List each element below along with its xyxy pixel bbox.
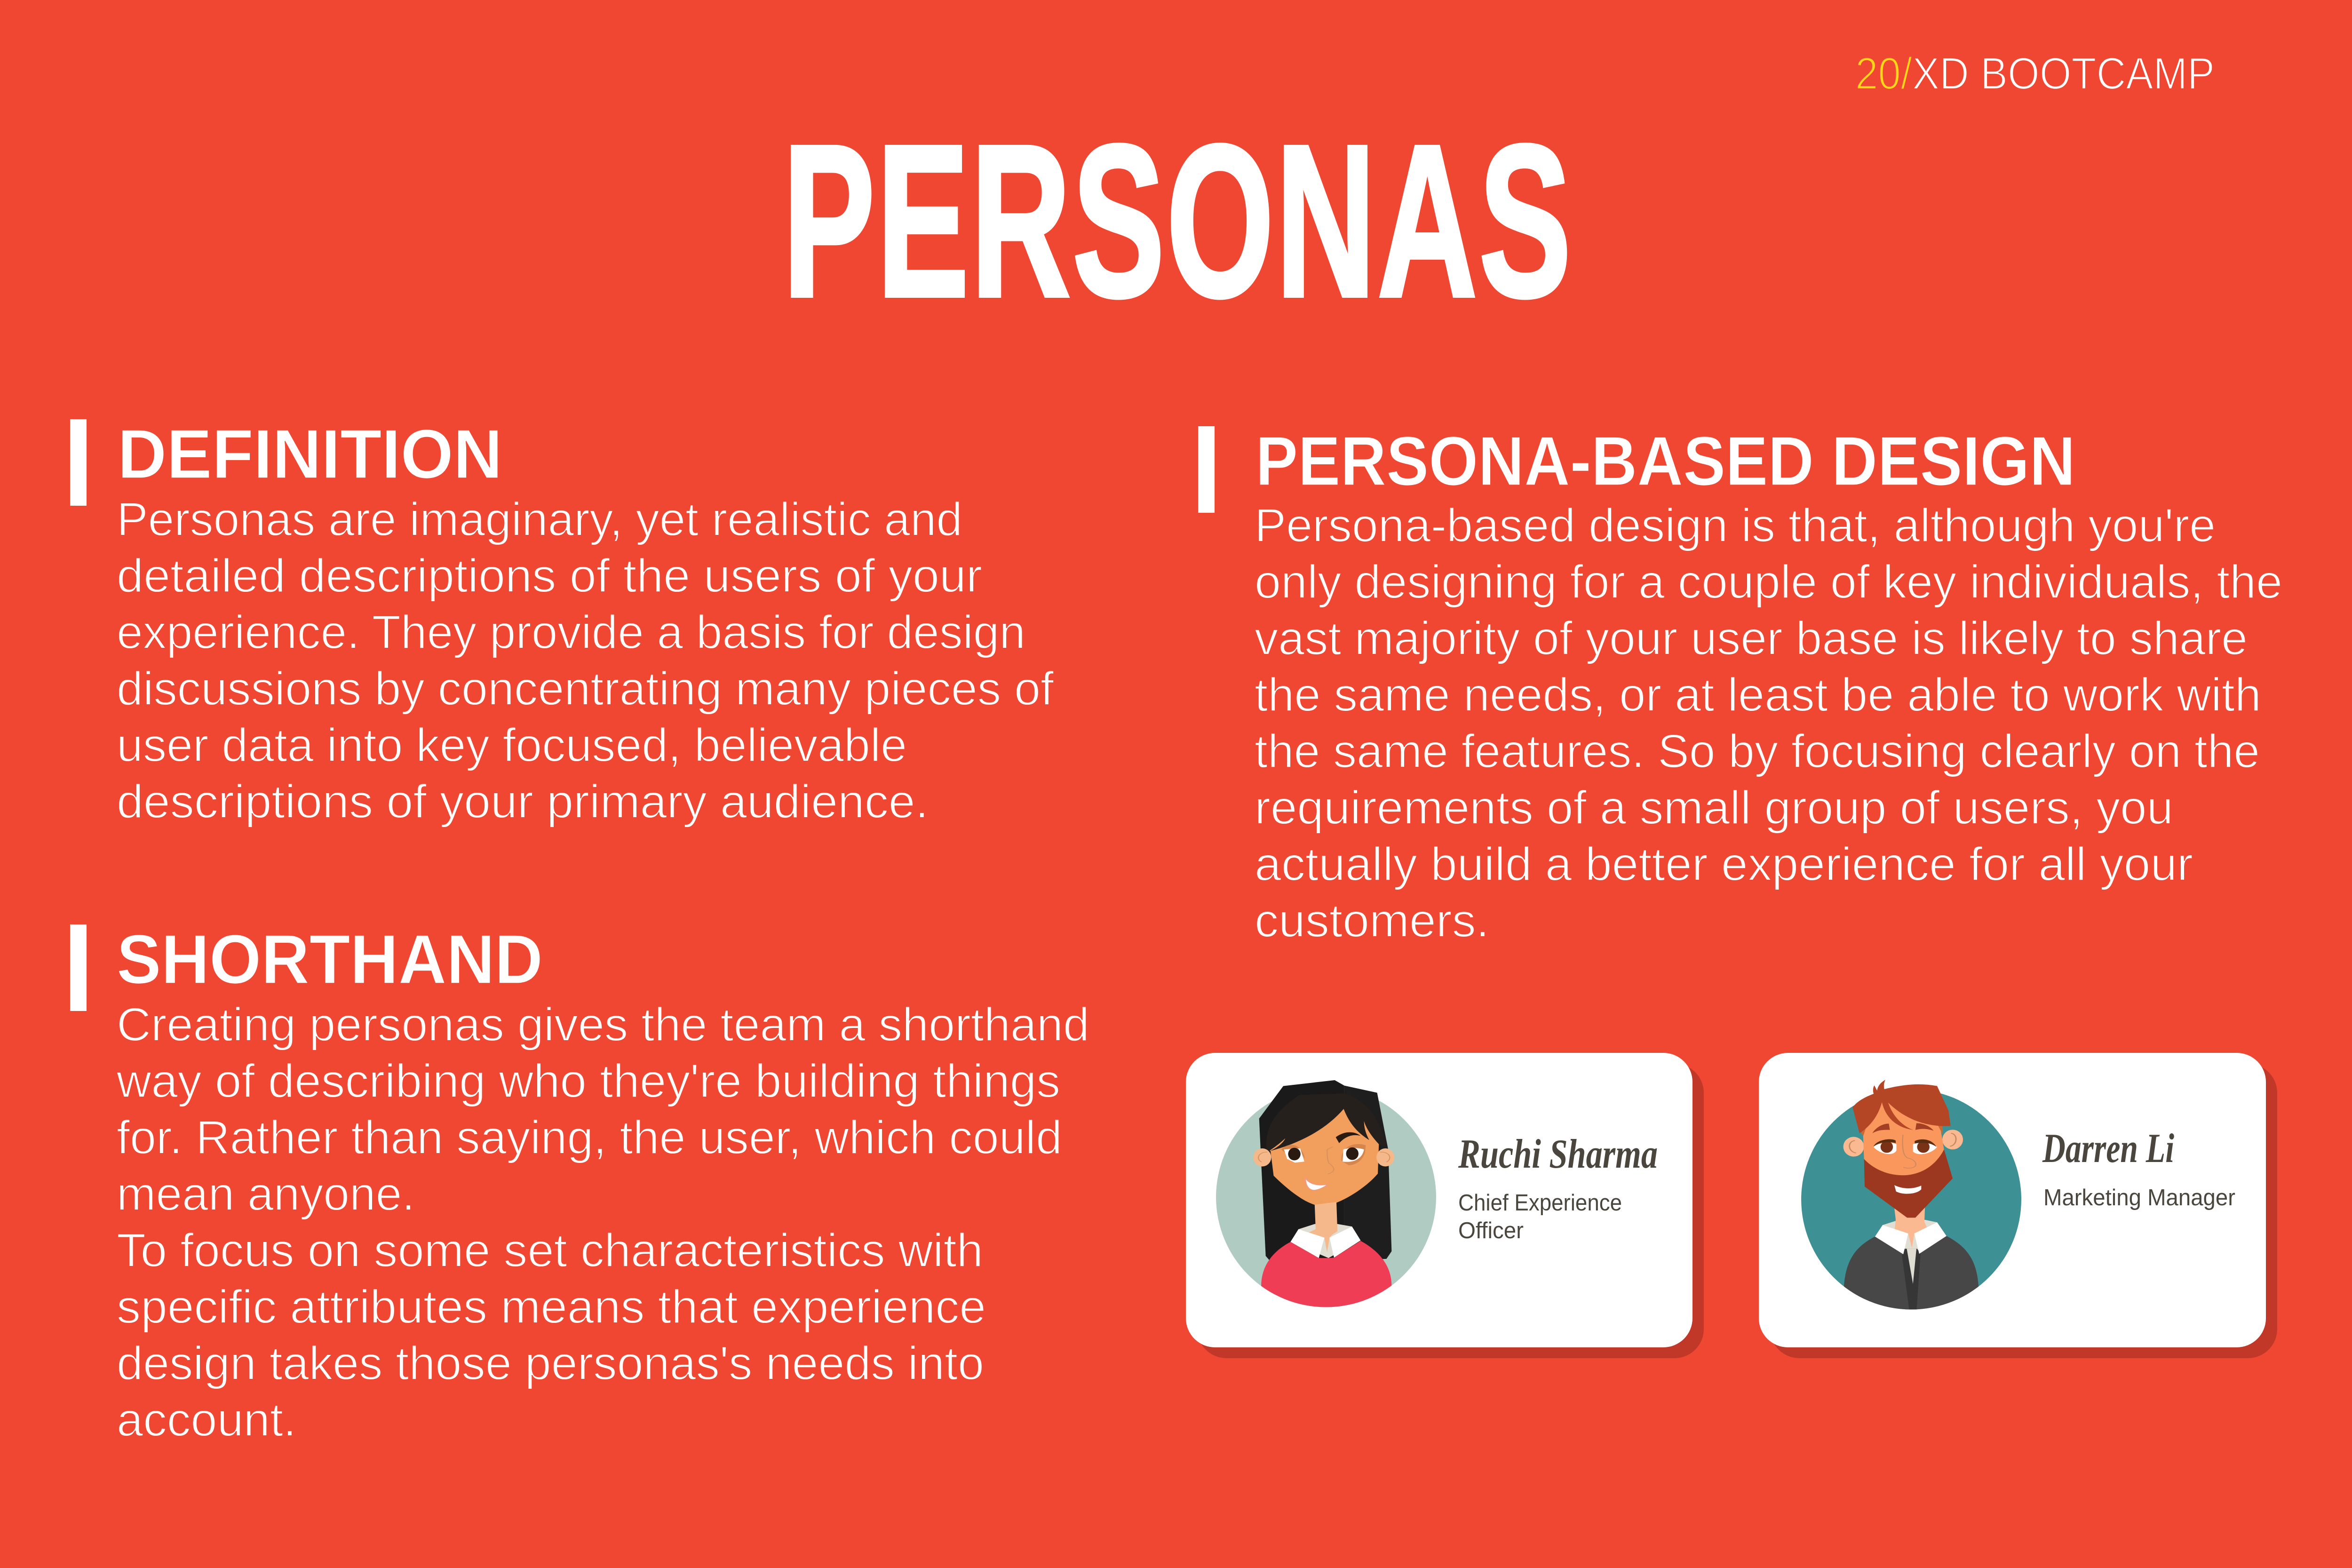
text block: persona-based design: requirements of a small group of users, you [1255,781,2173,834]
role: Marketing Manager: Marketing Manager [2043,1185,2235,1210]
card shadow [1197,1064,1704,1358]
card background [1759,1053,2266,1347]
bootcamp label: 20/XD BOOTCAMP [1855,48,2215,99]
text block: persona-based design: the same needs, or at least be able to work with [1255,669,2261,721]
accent bar: persona-based design [1198,426,1215,513]
persona card: Ruchi Sharma [1186,1053,1704,1358]
text block: definition: user data into key focused, believable [117,719,907,772]
text block: persona-based design: actually build a better experience for all your [1255,838,2193,891]
text block: shorthand: To focus on some set characteristics with [117,1224,983,1277]
text block: persona-based design: Persona-based design is that, although you're [1255,499,2216,552]
text block: shorthand [116,998,1089,1446]
text block: shorthand: account. [117,1393,296,1446]
heading: persona-based design: PERSONA-BASED DESIGN [1255,422,2075,500]
accent bar: definition [70,419,87,506]
text block: persona-based design: only designing for a couple of key individuals, the [1255,556,2282,608]
panel: persona-based design [1198,422,2282,947]
avatar: Ruchi Sharma [1216,1080,1436,1312]
accent bar: shorthand [70,924,87,1011]
text block: shorthand: Creating personas gives the team a shorthand [117,998,1089,1051]
card background [1186,1053,1692,1347]
role: Chief Experience Officer [1458,1190,1622,1243]
text block: shorthand: specific attributes means that experience [117,1281,986,1333]
text block: persona-based design: vast majority of your user base is likely to share [1255,612,2248,665]
heading: definition: DEFINITION [118,415,502,493]
role: Chief Experience Officer: Chief Experience [1458,1190,1622,1216]
name: Darren Li: Darren Li [2042,1126,2174,1171]
text block: shorthand: design takes those personas's needs into [117,1337,984,1390]
text block: persona-based design: customers. [1255,894,1489,947]
text block: shorthand: for. Rather than saying, the user, which could [117,1111,1062,1164]
heading: shorthand: SHORTHAND [117,921,543,998]
avatar: Darren Li [1801,1080,2021,1312]
persona card: Darren Li [1759,1053,2277,1358]
card shadow [1770,1064,2277,1358]
text block: definition: discussions by concentrating many pieces of [117,662,1054,715]
role: Chief Experience Officer: Officer [1458,1218,1524,1243]
text block: definition: experience. They provide a basis for design [117,606,1025,659]
title: PERSONAS [783,100,1573,342]
text block: definition [117,493,1054,828]
name: Ruchi Sharma: Ruchi Sharma [1458,1131,1658,1177]
text block: shorthand: way of describing who they're building things [116,1055,1060,1107]
text block: persona-based design [1255,499,2282,947]
text block: definition: detailed descriptions of the users of your [117,549,982,602]
panel: definition [70,415,1054,828]
text block: shorthand: mean anyone. [117,1168,415,1220]
text block: persona-based design: the same features. So by focusing clearly on the [1255,725,2260,778]
text block: definition: Personas are imaginary, yet realistic and [117,493,962,546]
text block: definition: descriptions of your primary audience. [117,775,929,828]
panel: shorthand [70,921,1089,1446]
